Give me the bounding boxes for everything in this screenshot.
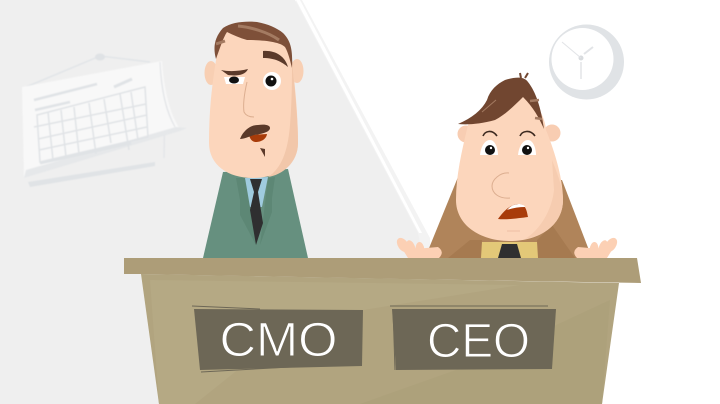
yellow shirt xyxy=(481,242,538,258)
plaque: CMO: CMO xyxy=(220,314,338,367)
mouth xyxy=(498,204,528,219)
hair xyxy=(458,78,544,129)
ears xyxy=(204,61,218,85)
left eye xyxy=(224,77,245,84)
left hand xyxy=(394,236,442,259)
character: CEO xyxy=(394,73,620,259)
light blue shirt xyxy=(245,177,268,207)
plaque: CEO xyxy=(390,306,556,370)
desk body xyxy=(141,274,619,404)
hair xyxy=(214,22,292,68)
green suit xyxy=(203,169,308,258)
head xyxy=(456,96,563,241)
black tie xyxy=(498,244,521,258)
right eye xyxy=(518,140,536,155)
cheek shading xyxy=(525,160,563,239)
nose xyxy=(492,173,510,198)
icon: wall clock xyxy=(549,24,624,100)
mouth xyxy=(249,134,267,142)
moustache xyxy=(240,125,270,139)
right eye xyxy=(263,72,281,90)
desk xyxy=(124,258,641,404)
left eye xyxy=(480,140,498,155)
eyebrows xyxy=(221,69,248,75)
nose xyxy=(244,82,254,117)
brown suit xyxy=(425,177,592,258)
goatee xyxy=(260,148,265,157)
desk top xyxy=(124,258,641,283)
plaque: CMO xyxy=(192,306,363,372)
cheek shading xyxy=(268,60,298,177)
icon: wall calendar xyxy=(22,54,187,187)
eyebrows xyxy=(483,131,497,136)
plaque: CEO: CEO xyxy=(427,315,530,368)
right hand xyxy=(574,236,620,259)
black tie xyxy=(250,179,263,245)
ears xyxy=(458,126,474,142)
head xyxy=(209,28,298,178)
character: CMO xyxy=(203,22,308,258)
